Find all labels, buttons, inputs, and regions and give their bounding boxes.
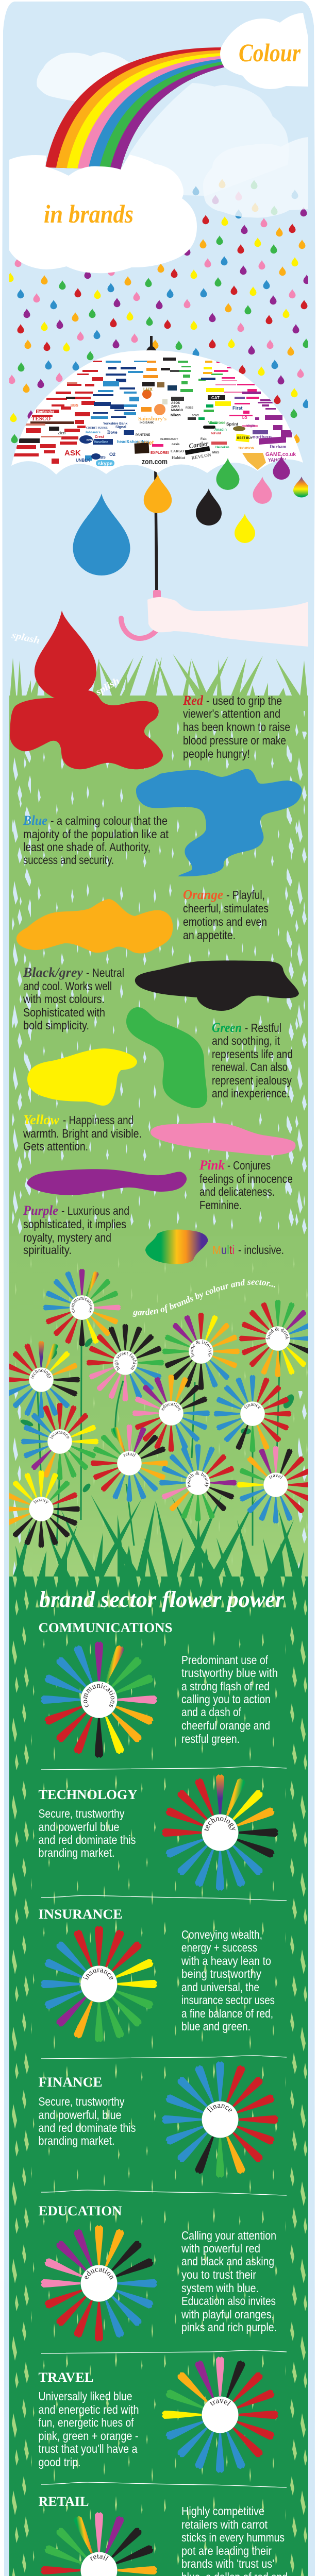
text: red meaning <box>182 693 290 760</box>
splash word: splash <box>10 630 41 646</box>
flower: luxury: luxury <box>33 1499 49 1504</box>
drop: purple <box>273 456 290 480</box>
drop: blue <box>73 494 130 575</box>
sector text: being trustworthy <box>181 1967 261 1980</box>
sector flower <box>41 1926 157 2042</box>
section: education <box>38 2204 277 2342</box>
text: green meaning: Green <box>212 1020 242 1035</box>
umbrella canopy with brand logos: Zizzi <box>58 432 65 435</box>
text: black/grey meaning: - Neutral <box>86 966 124 979</box>
sector text: and powerful, blue <box>38 2108 122 2122</box>
blob: purple <box>27 1169 187 1195</box>
umbrella canopy with brand logos: SONY <box>192 414 199 417</box>
drop: orange <box>144 474 172 513</box>
umbrella canopy with brand logos: Sprint <box>226 422 238 427</box>
cloud: large pale cloud <box>129 83 289 196</box>
dark foreground grass <box>13 1495 304 1577</box>
grass blades <box>9 654 308 706</box>
text: black/grey meaning: with most colours. <box>23 992 105 1006</box>
sector text: good trip. <box>38 2455 80 2469</box>
sector flower <box>41 2512 157 2576</box>
blob: pink <box>151 1123 295 1155</box>
text: black/grey meaning: and cool. Works well <box>23 979 112 993</box>
sector text: with playful oranges, <box>181 2308 274 2321</box>
text: pink meaning: feelings of innocence <box>199 1172 293 1185</box>
sector text: a fine balance of red, <box>181 2007 273 2020</box>
sector title: RETAIL <box>38 2494 89 2509</box>
text: purple meaning: royalty, mystery and <box>23 1231 111 1244</box>
blob: orange <box>16 899 173 953</box>
sector flower: finance <box>207 2104 232 2112</box>
flower: luxury <box>9 1470 80 1548</box>
sector title: INSURANCE <box>38 1907 123 1922</box>
sector text: Highly competitive <box>181 2504 264 2518</box>
flower: insurance <box>21 1402 99 1481</box>
sector flower: retail <box>90 2554 109 2561</box>
blob: blue <box>136 769 302 876</box>
text: pink meaning: and delicateness. <box>199 1185 275 1198</box>
garden of flowers <box>9 1268 308 1577</box>
text: green meaning: renewal. Can also <box>212 1060 288 1074</box>
sector flower: communications <box>84 1683 114 1707</box>
text: blue meaning: Blue <box>23 813 47 828</box>
sector text: sticks in every hummus <box>181 2531 285 2544</box>
grass field <box>9 696 308 1236</box>
sector flower <box>162 2357 278 2473</box>
blob: yellow <box>27 1048 137 1106</box>
flower: home and lifestyle <box>162 1313 240 1390</box>
sector text: blue and green. <box>181 2020 251 2033</box>
section: retail <box>38 2494 288 2576</box>
sector flower: technology <box>204 1816 236 1831</box>
sector text <box>181 2504 288 2576</box>
sector text: Secure, trustworthy <box>38 2095 125 2108</box>
dark green field <box>9 1577 308 2576</box>
text: purple meaning: sophisticated, it implies <box>23 1217 126 1231</box>
umbrella canopy with brand logos: head&shoulders <box>117 439 149 444</box>
umbrella canopy with brand logos: UNBLK <box>76 458 90 463</box>
drop: black <box>196 488 222 526</box>
flower: health and beauty <box>159 1444 237 1522</box>
umbrella canopy with brand logos: Nikon <box>171 414 180 417</box>
flower: education: education <box>162 1403 180 1411</box>
sector text: pink, green + orange - <box>38 2429 138 2443</box>
flower: communications: communications <box>71 1296 93 1313</box>
flower: high street fashion <box>87 1324 164 1401</box>
cloud: top right white cloud <box>220 13 308 89</box>
text: orange meaning: emotions and even <box>183 915 267 928</box>
umbrella canopy with brand logos: CAT <box>211 396 220 400</box>
umbrella canopy with brand logos: Heineken <box>215 446 229 449</box>
flower: technology: technology <box>31 1368 52 1379</box>
sector flower <box>162 1774 278 1891</box>
sector text: energy + success <box>181 1941 257 1954</box>
sector text: branding market. <box>38 2134 114 2147</box>
sector flower <box>162 2061 278 2178</box>
sector text <box>181 2229 277 2334</box>
text: pink meaning: - Conjures <box>227 1159 271 1172</box>
umbrella canopy with brand logos: northern <box>253 434 272 439</box>
drop: yellow <box>235 514 255 543</box>
cloud: translucent right cloud <box>203 137 308 218</box>
sector text: restful green. <box>181 1732 240 1745</box>
text: green meaning: represent jealousy <box>212 1074 292 1087</box>
flower: retail <box>91 1424 168 1502</box>
text: blue meaning <box>23 813 169 867</box>
text: orange meaning: Orange <box>183 887 223 902</box>
umbrella canopy with brand logos: First <box>232 405 243 411</box>
sector text: and energetic red with <box>38 2403 139 2416</box>
sector text: Calling your attention <box>181 2229 276 2242</box>
rainbow <box>45 47 225 170</box>
sector text: Secure, trustworthy <box>38 1807 125 1820</box>
sector text: insurance sector uses <box>181 1993 275 2007</box>
section: insurance <box>38 1907 275 2042</box>
umbrella canopy with brand logos: Sainsbury's <box>138 416 167 422</box>
text: red meaning: - used to grip the <box>206 694 282 707</box>
panel: sky <box>7 13 310 443</box>
text: multi meaning <box>212 1243 284 1257</box>
umbrella canopy with brand logos: Habitat <box>172 455 186 460</box>
flower: education <box>132 1375 210 1452</box>
text: green meaning: represents life and <box>212 1047 293 1061</box>
flower: travel <box>237 1446 308 1524</box>
text: orange meaning: - Playful, <box>226 888 265 902</box>
flower: communications <box>43 1268 121 1347</box>
umbrella canopy with brand logos: skype <box>98 461 113 467</box>
text: green meaning: - Restful <box>245 1021 281 1035</box>
umbrella canopy with brand logos: ASOS <box>171 402 180 405</box>
text: multi meaning: Multi <box>212 1243 235 1257</box>
sector text <box>38 2389 139 2469</box>
flower: finance <box>213 1375 292 1453</box>
umbrella canopy with brand logos: M&S <box>212 451 219 454</box>
sector flower: education <box>85 2268 113 2280</box>
text: pink meaning: Pink <box>199 1158 225 1173</box>
sector flower <box>41 1641 157 1758</box>
heading: garden of brands by colour and sector: garden of brands by colour and sector... <box>133 1279 275 1317</box>
umbrella canopy with brand logos: comet <box>137 440 154 446</box>
text: red meaning: viewer's attention and <box>183 707 280 720</box>
umbrella canopy with brand logos: ZARA <box>171 405 180 409</box>
text: orange meaning: cheerful, stimulates <box>183 902 269 915</box>
sector text: pinks and rich purple. <box>181 2320 277 2334</box>
sector text <box>181 1653 278 1745</box>
umbrella canopy with brand logos: zon.com <box>142 457 168 466</box>
flower: retail: retail <box>123 1452 136 1457</box>
text: blue meaning: - a calming colour that the <box>51 814 168 827</box>
sector title: TECHNOLOGY <box>38 1787 138 1802</box>
text: green meaning: and soothing, it <box>212 1034 280 1047</box>
umbrella canopy with brand logos: EXPLORE! <box>151 451 169 455</box>
sector text: Conveying wealth, <box>181 1928 262 1941</box>
sector text: you to trust their <box>181 2268 256 2281</box>
umbrella canopy with brand logos: RBS <box>98 456 106 460</box>
umbrella canopy with brand logos: oasis <box>172 443 180 446</box>
sector text: trust that you'll have a <box>38 2442 138 2455</box>
sector text: and a dash of <box>181 1705 241 1719</box>
sector text: a strong flash of red <box>181 1680 270 1693</box>
sector title: FINANCE <box>38 2075 102 2090</box>
umbrella canopy with brand logos: Vaseline <box>94 440 108 444</box>
text: red meaning: people hungry! <box>183 747 250 760</box>
flower: finance: finance <box>244 1403 261 1409</box>
sector title: EDUCATION <box>38 2204 122 2218</box>
heading: brand sector flower power: brand sector flower power <box>39 1587 285 1612</box>
umbrella canopy with brand logos: REVLON <box>191 452 212 461</box>
flower: health and beauty: health & beauty <box>188 1471 209 1488</box>
umbrella canopy with brand logos: MANGO <box>171 409 183 412</box>
text: red meaning: Red <box>182 693 204 708</box>
flower: travel: travel <box>269 1475 283 1479</box>
umbrella canopy with brand logos: REMBRANDT <box>160 438 178 441</box>
umbrella canopy with brand logos: Durham <box>270 444 287 449</box>
drop: green <box>216 458 239 490</box>
panel: brand sector flower power <box>9 1577 308 2576</box>
umbrella canopy with brand logos: Anadin <box>214 428 227 432</box>
text: blue meaning: least one shade of. Authority, <box>23 840 151 854</box>
sector flower: insurance <box>84 1968 113 1980</box>
umbrella canopy with brand logos: YAHOO! <box>268 457 286 463</box>
section: finance <box>38 2061 278 2178</box>
umbrella canopy with brand logos: virgin <box>246 425 255 428</box>
text: black/grey meaning: Sophisticated with <box>23 1006 105 1019</box>
umbrella canopy with brand logos: Johnson's <box>85 430 101 434</box>
sector text <box>38 1807 136 1859</box>
hand holding umbrella <box>121 590 308 647</box>
splish word: splish <box>93 675 122 698</box>
sector text: Universally liked blue <box>38 2389 132 2403</box>
blob: red with splash words <box>10 611 163 769</box>
section: technology <box>38 1774 278 1891</box>
umbrella canopy with brand logos: CREDIT SUISSE <box>86 427 108 430</box>
umbrella canopy with brand logos: Fab. <box>201 437 208 441</box>
panel: grass with colour meanings <box>9 611 308 1602</box>
umbrella canopy with brand logos: Waitrose <box>208 420 226 425</box>
umbrella canopy with brand logos: toFold <box>211 432 221 435</box>
text: multi meaning: - inclusive. <box>238 1243 284 1257</box>
text: pink meaning <box>199 1158 293 1212</box>
umbrella <box>11 336 303 590</box>
title: Colour: Colour <box>239 38 301 67</box>
text: black/grey meaning <box>23 965 124 1032</box>
sector text: and red dominate this <box>38 2121 136 2134</box>
text: orange meaning <box>183 887 269 942</box>
umbrella canopy with brand logos: LUX <box>143 387 153 392</box>
hand <box>147 597 308 647</box>
text: purple meaning <box>23 1203 129 1257</box>
sector text: and black and asking <box>181 2255 274 2268</box>
section: communications <box>38 1620 278 1758</box>
text: purple meaning: spirituality. <box>23 1243 72 1257</box>
paint drops <box>73 456 310 575</box>
sector text: calling you to action <box>181 1692 271 1706</box>
text: yellow meaning: warmth. Bright and visible. <box>23 1127 142 1140</box>
umbrella canopy with brand logos: LG <box>242 416 247 420</box>
cloud: large white cloud <box>9 155 197 273</box>
umbrella canopy with brand logos: Signal <box>115 426 126 429</box>
sector text: fun, energetic hues of <box>38 2416 134 2429</box>
text: purple meaning: - Luxurious and <box>61 1204 129 1217</box>
text: yellow meaning: Gets attention. <box>23 1140 88 1153</box>
text: purple meaning: Purple <box>23 1203 58 1218</box>
umbrella canopy with brand logos: NIVEA <box>87 439 95 442</box>
text: red meaning: has been known to raise <box>183 720 290 734</box>
title: in brands: in brands <box>44 199 134 228</box>
sector text: Predominant use of <box>181 1653 269 1667</box>
cloud: pale left cloud <box>37 52 139 103</box>
drop: pink <box>253 477 272 504</box>
umbrella canopy with brand logos: BEST BUY <box>237 437 253 440</box>
umbrella canopy with brand logos: Yorkshire Bank <box>103 422 128 426</box>
sector text: with a heavy lean to <box>181 1954 271 1968</box>
sector text: branding market. <box>38 1846 114 1859</box>
text: yellow meaning <box>23 1112 142 1153</box>
text: blue meaning: success and security. <box>23 853 114 867</box>
sector text: system with blue. <box>181 2281 259 2295</box>
umbrella finial <box>146 336 157 351</box>
umbrella canopy with brand logos: Santander <box>37 410 55 414</box>
umbrella canopy with brand logos <box>11 350 303 474</box>
sector text <box>181 1928 275 2033</box>
sector text: retailers with carrot <box>181 2518 268 2531</box>
text: yellow meaning: Yellow <box>23 1112 60 1127</box>
sector flower: travel <box>210 2399 231 2406</box>
umbrella canopy with brand logos: TESCO <box>31 416 51 422</box>
sector title: COMMUNICATIONS <box>38 1620 172 1635</box>
flower: high street fashion: high street fashion <box>113 1352 137 1371</box>
umbrella canopy with brand logos: Crest <box>95 435 105 439</box>
raindrops <box>7 179 310 443</box>
blob: green <box>126 1007 207 1108</box>
text: yellow meaning: - Happiness and <box>63 1113 134 1127</box>
flower: technology <box>9 1341 80 1419</box>
umbrella canopy with brand logos: Cartier <box>188 439 209 450</box>
section: travel <box>38 2357 278 2473</box>
umbrella canopy with brand logos: GAME.co.uk <box>265 452 296 457</box>
umbrella canopy with brand logos: REISS <box>186 406 194 410</box>
text: green meaning <box>212 1020 293 1100</box>
sector text: and universal, the <box>181 1980 259 1994</box>
sector text: trustworthy blue with <box>181 1666 278 1680</box>
text: green meaning: and inexperience. <box>212 1087 290 1100</box>
umbrella canopy with brand logos: Dove <box>107 430 118 435</box>
text: black/grey meaning: Black/grey <box>23 965 83 980</box>
umbrella hook <box>121 618 156 638</box>
umbrella canopy with brand logos: THOMSON <box>238 447 254 450</box>
sector text: with powerful red <box>181 2242 260 2255</box>
sector text: Education also invites <box>181 2294 276 2308</box>
sector text: brands with 'trust us' <box>181 2557 274 2570</box>
text: orange meaning: an appetite. <box>183 928 236 942</box>
flower: food and drink <box>239 1299 308 1378</box>
flower: food and drink: food & drink <box>266 1327 290 1340</box>
sector text: cheerful orange and <box>181 1719 270 1732</box>
garden field <box>9 1236 308 1602</box>
umbrella handle grip <box>153 590 161 599</box>
text: black/grey meaning: bold simplicity. <box>23 1019 89 1032</box>
drop: multicolour <box>293 477 310 498</box>
umbrella pole <box>154 464 158 590</box>
sector flower <box>41 2225 157 2342</box>
umbrella canopy with brand logos: UBS <box>71 404 78 408</box>
text: red meaning: blood pressure or make <box>183 734 286 747</box>
umbrella canopy with brand logos: PANTENE <box>136 434 150 437</box>
stems and leaves <box>20 1337 296 1546</box>
umbrella canopy with brand logos: ING BANK <box>140 421 154 425</box>
text: blue meaning: majority of the population like at <box>23 827 169 841</box>
umbrella canopy with brand logos: CARGO <box>171 449 185 453</box>
flower: home and lifestyle: home & lifestyle <box>191 1340 212 1358</box>
blob: black <box>135 960 299 1011</box>
umbrella canopy with brand logos: O2 <box>109 452 115 457</box>
sector text: and red dominate this <box>38 1833 136 1846</box>
blob: multicolour <box>145 1230 208 1264</box>
sector text: and powerful blue <box>38 1820 120 1834</box>
text: pink meaning: Feminine. <box>199 1198 242 1212</box>
sector title: TRAVEL <box>38 2370 94 2385</box>
umbrella canopy with brand logos: ASK <box>64 449 81 457</box>
flower: insurance: insurance <box>49 1431 69 1439</box>
sector text <box>38 2095 136 2147</box>
sector text: pot are leading their <box>181 2544 272 2557</box>
